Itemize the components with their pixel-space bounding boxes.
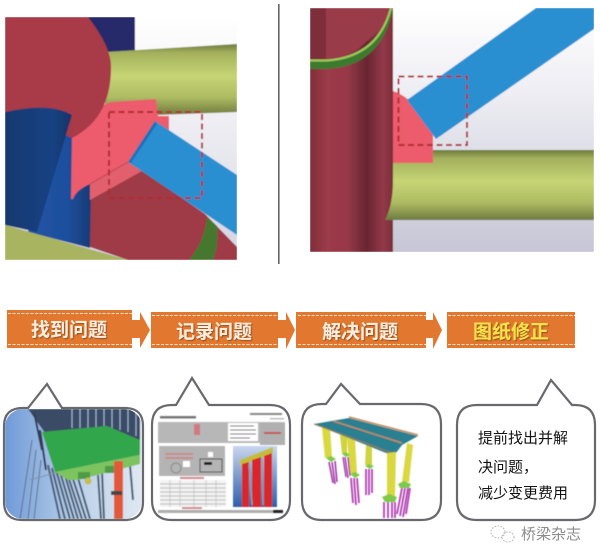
olive tube bbox=[385, 150, 594, 220]
dashed highlight box bbox=[109, 112, 202, 198]
cap dark strip bbox=[310, 8, 326, 60]
step 1: find problem: 找到问题 bbox=[31, 319, 107, 341]
green collar bbox=[189, 217, 218, 260]
background bbox=[393, 8, 594, 252]
front piers bbox=[382, 443, 413, 518]
step 2: record problem bbox=[151, 312, 295, 349]
summary text: 决问题， bbox=[478, 459, 538, 476]
bubble 4: summary note bbox=[457, 380, 595, 520]
red cylinder, upper bbox=[5, 17, 111, 138]
panel: left 3D joint view with problem bbox=[5, 17, 237, 260]
watermark text: 桥梁杂志 bbox=[521, 526, 581, 543]
dashed highlight box bbox=[398, 76, 467, 145]
process flow: arrows bbox=[7, 310, 575, 349]
pink gusset bbox=[393, 91, 433, 163]
summary text: 减少变更费用 bbox=[478, 485, 568, 502]
olive tube, lower bbox=[5, 225, 128, 260]
olive tube, upper bbox=[105, 44, 237, 115]
bubble outline bbox=[457, 380, 595, 520]
dark navy member, top bbox=[85, 17, 135, 55]
lower dark red column bbox=[90, 165, 237, 260]
bridge model bbox=[314, 417, 418, 518]
step 4: correct drawings: 图纸修正 bbox=[473, 320, 549, 343]
plate seam bbox=[90, 162, 128, 184]
document contents bbox=[158, 413, 285, 513]
bubble 3: solved bridge model bbox=[302, 384, 441, 520]
watermark bbox=[491, 526, 581, 543]
divider between views bbox=[278, 4, 280, 264]
pink gusset plate bbox=[71, 99, 169, 199]
blue brace bbox=[128, 121, 237, 235]
column cap bbox=[350, 8, 390, 52]
green ring highlight bbox=[310, 8, 391, 60]
step 2: record problem: 记录问题 bbox=[176, 321, 252, 343]
green ring bbox=[310, 8, 393, 69]
lower pink plate bbox=[90, 158, 142, 200]
icon: chat dots bbox=[491, 526, 514, 542]
step 4: correct drawings bbox=[447, 312, 575, 348]
step 3: solve problem: 解决问题 bbox=[322, 321, 398, 343]
summary text: 提前找出并解 bbox=[478, 430, 568, 447]
model scene bbox=[5, 409, 142, 519]
brace edge bbox=[128, 121, 157, 163]
background bbox=[5, 17, 237, 260]
navy cone bbox=[5, 108, 72, 232]
mid blue face bbox=[28, 134, 92, 248]
blue brace bbox=[407, 8, 594, 139]
step 1: find problem bbox=[7, 310, 150, 348]
red column bbox=[310, 8, 393, 252]
step 3: solve problem bbox=[296, 312, 442, 349]
deck bbox=[314, 418, 418, 453]
bubble outline bbox=[4, 384, 143, 520]
bubble outline bbox=[152, 378, 290, 520]
bubble outline bbox=[302, 384, 441, 520]
bubble 1: model screenshot bbox=[4, 384, 143, 520]
panel: right 3D joint view resolved bbox=[310, 8, 594, 252]
bubble 2: issue record document bbox=[152, 378, 290, 520]
back piers bbox=[322, 428, 374, 505]
